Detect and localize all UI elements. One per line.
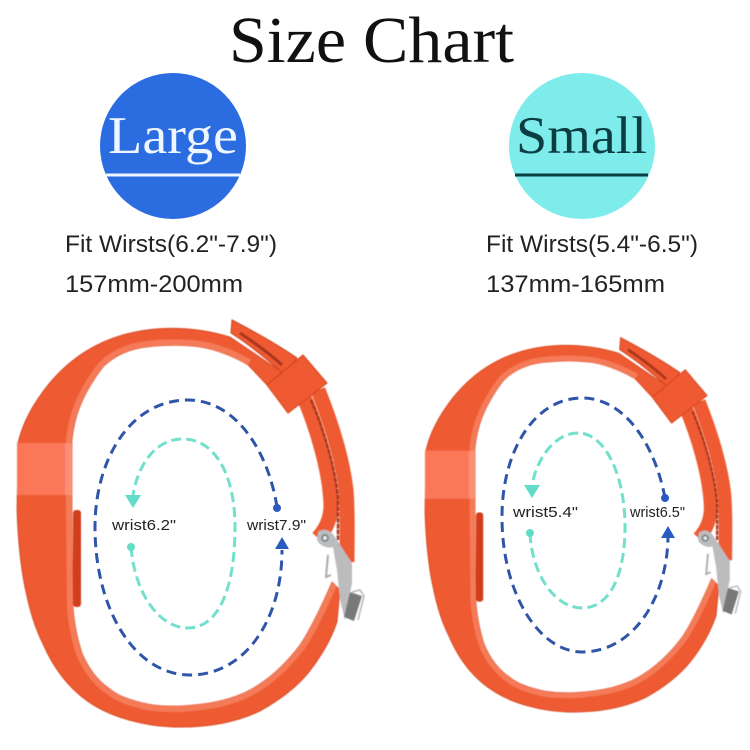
band keeper loop: [652, 370, 707, 423]
title: Size Chart: [229, 4, 514, 77]
wrist label 6.5: wrist6.5": [629, 504, 685, 521]
small fit text: 137mm-165mm: [486, 271, 665, 298]
wrist label 5.4: wrist5.4": [512, 504, 578, 521]
side button: [73, 510, 81, 607]
small band: [425, 338, 741, 712]
metal clasp: [317, 530, 364, 621]
band keeper loop: [267, 355, 327, 413]
tracker face: [425, 451, 475, 499]
metal clasp: [698, 531, 741, 615]
panel: small badge: Small: [516, 107, 647, 165]
panel: large badge: [100, 73, 246, 219]
small fit text: Fit Wirsts(5.4"-6.5"): [486, 231, 698, 258]
large teal dashed loop: [125, 439, 235, 628]
panel: large badge: Large: [108, 107, 238, 165]
large band: [17, 320, 364, 727]
large fit text: 157mm-200mm: [65, 271, 243, 298]
tracker face: [17, 443, 72, 495]
small teal dashed loop: [524, 433, 625, 608]
large fit text: Fit Wirsts(6.2"-7.9"): [65, 231, 277, 258]
large fit text: [65, 231, 277, 298]
wrist label 7.9: wrist7.9": [246, 517, 306, 534]
wrist label 6.2: wrist6.2": [111, 517, 176, 534]
panel: small badge: [509, 73, 655, 219]
small blue dashed loop: [502, 398, 675, 652]
side button: [476, 512, 483, 602]
large blue dashed loop: [95, 400, 289, 675]
small fit text: [486, 231, 698, 298]
